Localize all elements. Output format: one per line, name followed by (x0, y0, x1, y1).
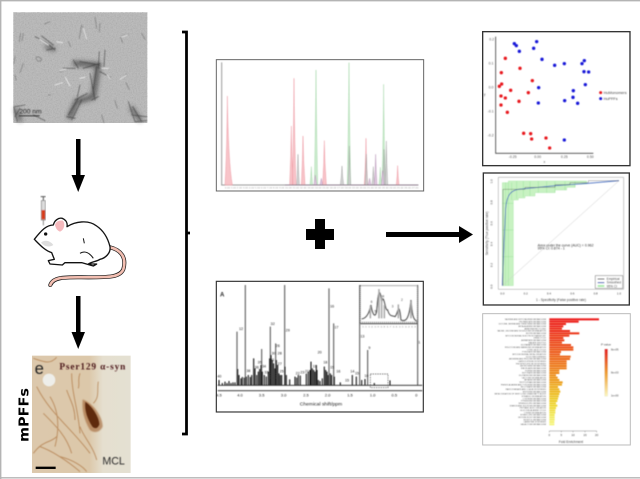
mouse tail (50, 247, 124, 285)
pathway labels: PHYTANIC ACID OXIDATION (520, 407, 547, 410)
pathway labels: MITOCHONDRIAL BETA-OXIDATION (512, 353, 547, 356)
peak numbers: 1 (418, 341, 420, 345)
pathway labels: TAURINE AND HYPOTAURINE METABOLISM (505, 318, 546, 321)
pathway labels: PANTOTHENATE AND COA BIOSYNTHESIS (506, 388, 547, 391)
peak numbers: 28 (278, 351, 282, 355)
legend: HuPFFs (604, 97, 618, 101)
axis tick labels: 1.0 (370, 392, 376, 397)
panel: ROC curve: 95% CI: 0.874 - 1 (538, 246, 565, 250)
plus sign (306, 219, 334, 249)
green peaks (310, 63, 385, 185)
vacuole (43, 374, 55, 386)
peak numbers: 20 (318, 351, 322, 355)
red points: Hu monomers (498, 57, 551, 150)
axis labels: 0.0 (500, 291, 505, 295)
peak numbers: 15 (355, 371, 359, 375)
diagonal reference (502, 181, 619, 286)
pathway labels: AMMONIA RECYCLING (524, 327, 546, 330)
panel: scatter plot (483, 32, 630, 166)
panel: ROC curve (483, 173, 629, 305)
tick labels: 0.1 (489, 62, 493, 66)
purple peaks (314, 154, 384, 185)
inset box (360, 286, 417, 328)
region label: MCL (102, 456, 125, 468)
fibril clusters (14, 17, 147, 123)
peak numbers (217, 305, 420, 383)
inset box: 4 (382, 295, 384, 299)
bars (549, 318, 599, 425)
axis labels: 0.6 (570, 291, 575, 295)
axis tick labels: 0 (415, 392, 418, 397)
axis labels: 1 - Specificity (False positive rate) (536, 298, 586, 302)
axis labels: 0.0 (490, 284, 494, 289)
tick labels: -0.25 (509, 155, 517, 159)
peak numbers: 15 (330, 365, 334, 369)
legend: 95% CI (607, 284, 617, 288)
axis title: Chemical shift/ppm (300, 402, 342, 408)
axis labels: 1.0 (490, 179, 494, 183)
pathway labels: FRUCTOSE AND MANNOSE DEGRADATION (505, 346, 547, 349)
peak numbers: 9 (368, 346, 370, 350)
pathway labels: STARCH AND SUCROSE METABOLISM (510, 404, 546, 407)
peak numbers: 12 (239, 327, 243, 331)
peak numbers: 10 (364, 374, 368, 378)
pathway labels: VALINE, LEUCINE AND ISOLEUCINE DEGRADATION (497, 330, 547, 333)
axis labels: Sensitivity (True positive rate) (485, 211, 489, 255)
panel: NMR spectrum (216, 281, 423, 412)
legend: HuMonomers (604, 91, 627, 95)
peak numbers: 29 (286, 329, 290, 333)
peak numbers: 16 (330, 305, 334, 309)
peak numbers: 21 (305, 369, 309, 373)
axis tick labels: 4.5 (216, 392, 223, 397)
arrow: micrograph to mouse (72, 139, 85, 192)
peak numbers: 36 (255, 365, 259, 369)
pathway labels: PHOSPHOLIPID BIOSYNTHESIS (516, 363, 547, 365)
inset box: 3 (392, 305, 394, 309)
dashed zoom box (370, 374, 388, 388)
p value legend: 8e+05 (611, 348, 619, 352)
peak numbers: 23 (300, 371, 304, 375)
peak numbers: 13 (360, 335, 364, 339)
axes (496, 37, 593, 153)
pathway labels: BIOTIN METABOLISM (526, 332, 546, 335)
annotation: Area under the curve (AUC) = 0.962 (538, 243, 594, 247)
tick labels: 0.0 (489, 86, 493, 90)
pathway labels: PROPANOATE METABOLISM (519, 320, 546, 323)
axis labels: 0.8 (490, 200, 494, 204)
x axis: Fold Enrichment (559, 440, 583, 444)
pathway labels: HISTIDINE METABOLISM (523, 390, 546, 393)
panel letter: e (35, 359, 44, 378)
tick labels: -0.1 (488, 110, 494, 114)
peak numbers: 15 (345, 379, 349, 383)
axis tick labels: 0.00 1.00 2.00 3.00 4.00 5.00 6.00 7.00 8.00 9.00 10.00 11.00 12.00 13.00 14.00 15.00 16.00 17.00 18.00 19.00 20.00 21.00 22.00 23.00 24.00 25.00 26.00 27.00 (225, 188, 419, 190)
pathway labels: PYRUVATE METABOLISM (522, 351, 546, 354)
axis labels: 0.4 (490, 242, 494, 246)
tick labels: x (543, 160, 545, 164)
peak numbers: 17 (334, 325, 338, 329)
tick labels: 0.00 (534, 155, 541, 159)
pathway labels: PYRIMIDINE METABOLISM (521, 400, 546, 403)
peak numbers: 31 (270, 358, 274, 362)
peak numbers: 34 (262, 365, 266, 369)
stain label: Pser129 α-syn (59, 362, 126, 372)
pathway labels: GALACTOSE METABOLISM (520, 423, 546, 426)
x axis: 20 (595, 433, 599, 437)
pathway labels: RIBOFLAVIN METABOLISM (521, 367, 546, 370)
pathway labels: MALATE SHUTTLE (529, 341, 547, 344)
plot frame (498, 177, 624, 289)
x axis: 15 (583, 433, 587, 437)
peak numbers: 27 (278, 362, 282, 366)
peak numbers: 18 (323, 360, 327, 364)
axis labels: 0.2 (524, 291, 528, 295)
dark neuron halo (82, 399, 103, 432)
pathway labels: MITOCHONDRIAL ELECTRON TRANSPORT (505, 334, 547, 337)
pathway labels: ETHER LIPID METABOLISM (520, 414, 546, 417)
pathway labels: CARNITINE SYNTHESIS (523, 421, 547, 424)
pathway labels: CITRIC ACID CYCLE (527, 348, 547, 351)
icon: syringe (41, 197, 46, 225)
x axis: 10 (571, 433, 575, 437)
dark cluster shading (16, 47, 140, 120)
pink peaks (225, 78, 399, 185)
pathway labels: BETA-ALANINE METABOLISM (518, 325, 546, 328)
pathway labels: METHIONINE METABOLISM (520, 365, 546, 368)
pathway labels: GLUTATHIONE METABOLISM (519, 374, 546, 377)
panel: chromatogram (216, 60, 424, 191)
tick labels: -0.2 (488, 134, 494, 138)
axis tick labels: 3.0 (281, 392, 287, 397)
label: mPFFs: mPFFs (16, 388, 32, 442)
legend (595, 276, 623, 288)
panel letter: A (220, 293, 225, 299)
micrograph: Pser129 stained tissue (32, 356, 131, 473)
p value legend: P value (601, 342, 611, 346)
pathway labels: GLUCONEOGENESIS (526, 356, 547, 358)
pathway labels (495, 318, 547, 426)
smoothed curve (502, 181, 619, 286)
axis tick labels: 4.0 (237, 392, 244, 397)
axis tick labels: 2.0 (325, 392, 331, 397)
pathway labels: ASPARTATE METABOLISM (521, 339, 546, 342)
bracket (182, 32, 190, 434)
peak numbers: 30 (272, 351, 276, 355)
baseline and axis (218, 385, 422, 391)
axes (222, 62, 418, 185)
peak numbers: 14 (350, 369, 354, 373)
peak numbers: 32 (271, 322, 275, 326)
tick labels: y (484, 93, 486, 97)
tick labels: 0.2 (489, 38, 494, 42)
peak numbers: 26 (276, 344, 280, 348)
legend (599, 91, 627, 101)
peak numbers: 35 (258, 360, 262, 364)
pathway labels: KETONE BODY METABOLISM (518, 416, 546, 419)
light fibril highlights (40, 28, 127, 86)
axis tick labels: 0.5 (392, 392, 398, 397)
spectrum peaks tall grey (237, 285, 418, 385)
inset box: 5 (374, 309, 376, 313)
pathway labels: NICOTINATE METABOLISM (521, 386, 546, 389)
peak numbers: 22 (296, 371, 300, 375)
axis tick labels: 3.5 (259, 392, 265, 397)
scale bar (36, 467, 56, 469)
axis labels: 0.4 (547, 291, 551, 295)
p value legend: 8e+03 (611, 370, 619, 374)
peak numbers: 19 (313, 365, 317, 369)
axis tick labels (216, 392, 418, 397)
axis tick labels: 2.5 (303, 392, 310, 397)
p value legend (601, 342, 619, 398)
tick labels (484, 38, 594, 164)
pathway labels: BETAINE METABOLISM (524, 379, 546, 382)
peak numbers: 38 (246, 369, 250, 373)
arrow: to statistical results (386, 226, 473, 243)
p value legend: 1e+00 (611, 394, 619, 398)
peak numbers: 33 (264, 371, 268, 375)
axis tick labels: 1.5 (347, 392, 354, 397)
empirical curve (503, 181, 619, 286)
inset box: 6 (371, 300, 373, 304)
x axis: 0 (548, 433, 550, 437)
axis labels: 0.8 (594, 291, 598, 295)
x axis (548, 431, 599, 444)
pathway labels: PHENYLALANINE AND TYROSINE METABOLISM (501, 383, 546, 386)
pathway labels: INOSITOL METABOLISM (523, 418, 546, 421)
icon: injected mouse (34, 197, 124, 285)
spectrum peaks black (219, 355, 390, 385)
pathway labels: GLYCINE, SERINE AND THREONINE METABOLISM (499, 323, 546, 326)
pathway labels: CARDIOLIPIN BIOSYNTHESIS (518, 360, 547, 363)
grey peaks (297, 141, 388, 185)
pathway labels: LACTOSE DEGRADATION (522, 376, 547, 379)
x axis: 5 (560, 433, 562, 437)
mouse ear (55, 221, 64, 232)
axis labels: 0.2 (490, 263, 494, 267)
pathway labels: ARGININE AND PROLINE METABOLISM (509, 358, 546, 361)
pathway labels: SPHINGOLIPID METABOLISM (518, 402, 546, 405)
legend: Smoothed (607, 281, 621, 285)
blue points: Hu PFFs (513, 40, 590, 142)
pathway labels: UREA CYCLE (533, 337, 547, 340)
pathway labels: CYSTEINE METABOLISM (523, 397, 546, 400)
confidence interval (502, 181, 587, 286)
axis labels: 1.0 (617, 291, 621, 295)
pathway labels: LYSINE DEGRADATION (524, 411, 547, 414)
pathway labels: PURINE METABOLISM (525, 369, 546, 372)
stained fibres (33, 357, 98, 472)
peak numbers: 40 (217, 375, 221, 379)
pathway labels: BUTYRATE METABOLISM (522, 372, 546, 375)
pathway labels: GLUTAMATE METABOLISM (521, 344, 546, 347)
mouse details (41, 232, 93, 258)
axis labels (485, 179, 621, 302)
scale bar: 200 nm (19, 109, 42, 116)
inset box: 2 (401, 298, 403, 302)
axis labels: 0.6 (490, 221, 494, 225)
tick labels: 0.25 (561, 155, 568, 159)
pathway labels: TRYPTOPHAN METABOLISM (519, 381, 546, 384)
peak numbers: 16 (336, 369, 340, 373)
tick labels: 0.50 (587, 155, 594, 159)
pathway labels: BETA OXIDATION OF VERY LONG CHAIN FATTY ACIDS (495, 393, 547, 396)
micrograph: fibrils (13, 12, 147, 123)
pathway labels: GLUCOSE-ALANINE CYCLE (520, 409, 547, 412)
legend: Empirical (607, 277, 620, 281)
dark neuron (85, 402, 99, 428)
inset box: 1.1 1.0 0.9 0.8 0.7 0.6 0.5 0.4 0.3 (362, 326, 416, 328)
panel: pathway enrichment bar chart (483, 314, 630, 445)
arrow: mouse to histology (72, 296, 85, 349)
mouse body (34, 218, 110, 266)
peak numbers: 25 (280, 369, 284, 373)
pathway labels: ETHANOL DEGRADATION (522, 395, 547, 398)
